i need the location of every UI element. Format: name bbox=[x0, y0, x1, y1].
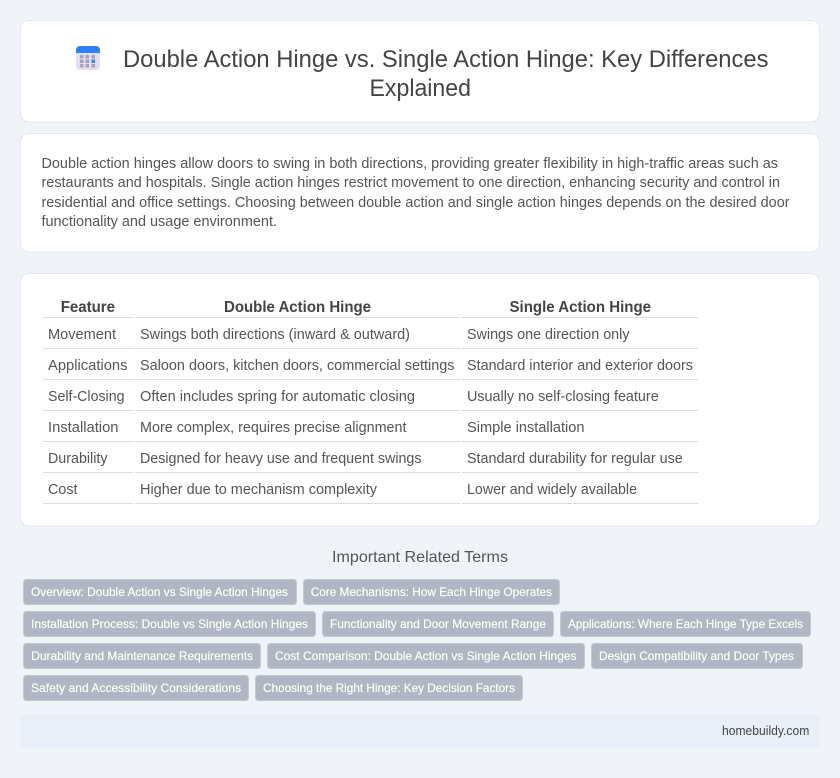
tag: overview: Overview: Double Action vs Single Action Hinges bbox=[31, 585, 288, 599]
panel: comparison table bbox=[20, 274, 820, 526]
tag: cost comparison: Cost Comparison: Double Action vs Single Action Hinges bbox=[275, 649, 576, 663]
table row: self-closing: Self-Closing bbox=[48, 389, 124, 405]
tag: functionality: Functionality and Door Movement Range bbox=[330, 617, 546, 631]
table header row bbox=[43, 299, 698, 318]
table header row: Single Action Hinge bbox=[510, 299, 651, 316]
table row: self-closing bbox=[43, 389, 698, 411]
title: Double Action Hinge vs. Single Action Hinge: Key Differences bbox=[123, 46, 768, 73]
tag: applications: Applications: Where Each Hinge Type Excels bbox=[568, 617, 803, 631]
tag: safety bbox=[24, 676, 248, 700]
tag: design compatibility bbox=[592, 644, 802, 668]
table header row: Feature bbox=[61, 299, 115, 316]
text block: introduction paragraph: functionality and usage environment. bbox=[42, 214, 277, 230]
table row: installation: Simple installation bbox=[467, 420, 584, 436]
table row: applications: Standard interior and exterior doors bbox=[467, 358, 693, 374]
table row: durability bbox=[43, 451, 698, 473]
table row: self-closing: Often includes spring for automatic closing bbox=[140, 389, 415, 405]
title bbox=[123, 46, 768, 102]
panel: related term tags bbox=[24, 580, 810, 700]
table row: installation bbox=[43, 420, 698, 442]
table row: applications: Applications bbox=[48, 358, 128, 374]
text block: introduction paragraph: Double action hinges allow doors to swing in both directions, providing greater flexibility in high-traffic areas such as bbox=[42, 156, 778, 172]
panel: introduction bbox=[20, 134, 820, 252]
table row: cost: Lower and widely available bbox=[467, 482, 637, 498]
tag: durability bbox=[24, 644, 260, 668]
text block: introduction paragraph bbox=[42, 156, 790, 230]
table row: movement bbox=[43, 327, 698, 349]
table row: cost bbox=[43, 482, 698, 504]
heading: important related terms: Important Related Terms bbox=[332, 549, 508, 566]
tag: installation process: Installation Process: Double vs Single Action Hinges bbox=[31, 617, 308, 631]
table row: durability: Durability bbox=[48, 451, 108, 467]
tag: functionality bbox=[322, 612, 554, 636]
table row: movement: Swings one direction only bbox=[467, 327, 630, 343]
table row: movement: Swings both directions (inward & outward) bbox=[140, 327, 410, 343]
panel: header bbox=[20, 20, 820, 122]
tag: core mechanisms: Core Mechanisms: How Each Hinge Operates bbox=[311, 585, 552, 599]
text block: introduction paragraph: residential and office settings. Choosing between double action and single action hinges depends on the desired door bbox=[42, 195, 790, 211]
text block: introduction paragraph: restaurants and hospitals. Single action hinges restrict movement to one direction, enhancing security and control in bbox=[42, 175, 780, 191]
table row: durability: Designed for heavy use and frequent swings bbox=[140, 451, 422, 467]
tag: core mechanisms bbox=[304, 580, 560, 604]
table header row: Double Action Hinge bbox=[224, 299, 371, 316]
table row: applications: Saloon doors, kitchen doors, commercial settings bbox=[140, 358, 454, 374]
icon: calendar bbox=[76, 46, 100, 70]
tag: installation process bbox=[24, 612, 316, 636]
table row: durability: Standard durability for regular use bbox=[467, 451, 683, 467]
tag: cost comparison bbox=[268, 644, 584, 668]
tag: applications bbox=[560, 612, 810, 636]
table row: movement: Movement bbox=[48, 327, 116, 343]
tag: durability: Durability and Maintenance Requirements bbox=[31, 649, 253, 663]
tag: design compatibility: Design Compatibility and Door Types bbox=[599, 649, 794, 663]
footer: homebuildy.com bbox=[722, 723, 809, 738]
tag: choosing the right hinge bbox=[256, 676, 522, 700]
table row: applications bbox=[43, 358, 698, 380]
table row: installation: More complex, requires precise alignment bbox=[140, 420, 407, 436]
table row: self-closing: Usually no self-closing feature bbox=[467, 389, 659, 405]
table row: cost: Cost bbox=[48, 482, 78, 498]
title: Explained bbox=[370, 75, 471, 102]
table row: installation: Installation bbox=[48, 420, 118, 436]
table row: cost: Higher due to mechanism complexity bbox=[140, 482, 378, 498]
tag: choosing the right hinge: Choosing the Right Hinge: Key Decision Factors bbox=[263, 681, 515, 695]
tag: safety: Safety and Accessibility Considerations bbox=[31, 681, 241, 695]
footer bbox=[20, 714, 820, 748]
tag: overview bbox=[24, 580, 296, 604]
